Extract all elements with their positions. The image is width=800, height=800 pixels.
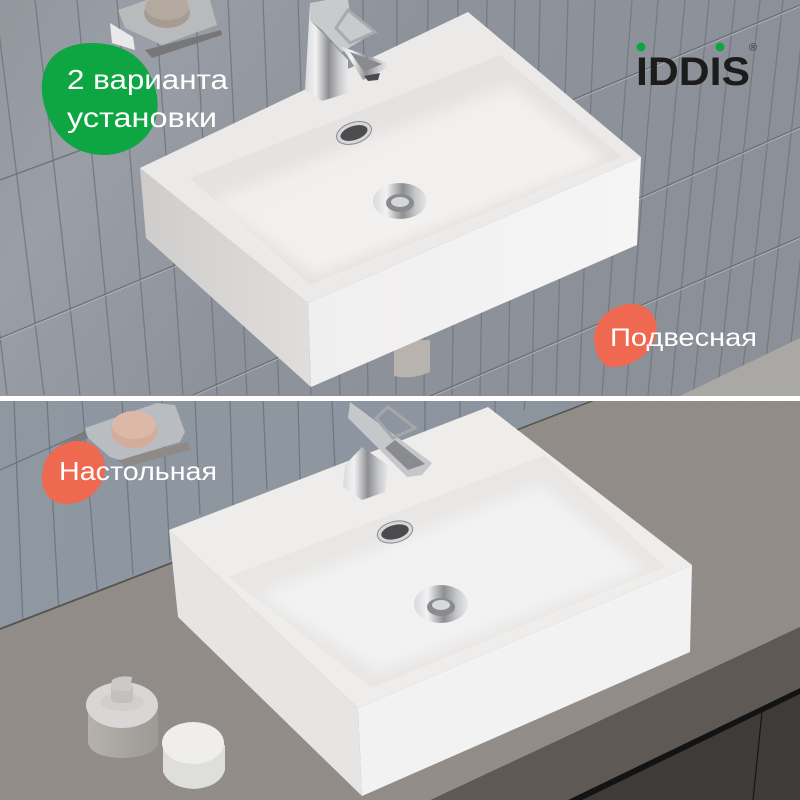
coral badge blob: countertop: [42, 441, 105, 504]
faucet: [305, 0, 388, 101]
jar with pump: [86, 676, 158, 758]
overflow hole: [336, 121, 372, 145]
soap dish on wall: [60, 403, 190, 467]
countertop basin: [169, 407, 692, 796]
label: countertop: Настольная: [59, 456, 217, 486]
floor: [680, 338, 800, 396]
wall-mounted basin: [140, 12, 641, 387]
overflow hole: [376, 520, 414, 544]
soap dish on wall: [110, 0, 222, 58]
drain: [373, 183, 427, 219]
logo: IDDIS: ®: [749, 42, 757, 54]
drain: [414, 585, 468, 623]
tiled wall: [0, 0, 800, 398]
faucet: [343, 402, 432, 500]
logo: IDDIS: IDDIS: [636, 50, 750, 94]
heading line two: установки: [67, 102, 217, 133]
cream jar: [162, 722, 225, 789]
tiled wall: [0, 400, 800, 650]
panel: wall-mounted basin photo: [0, 0, 800, 398]
label: wall-mounted: Подвесная: [610, 324, 757, 352]
coral badge blob: wall-mounted: [594, 304, 657, 367]
siphon pipe: [394, 340, 430, 377]
heading: 2 variants of installation: 2 варианта: [67, 64, 228, 95]
green badge blob: [42, 43, 158, 155]
panel: countertop basin photo: [0, 400, 800, 800]
countertop: [0, 401, 800, 800]
